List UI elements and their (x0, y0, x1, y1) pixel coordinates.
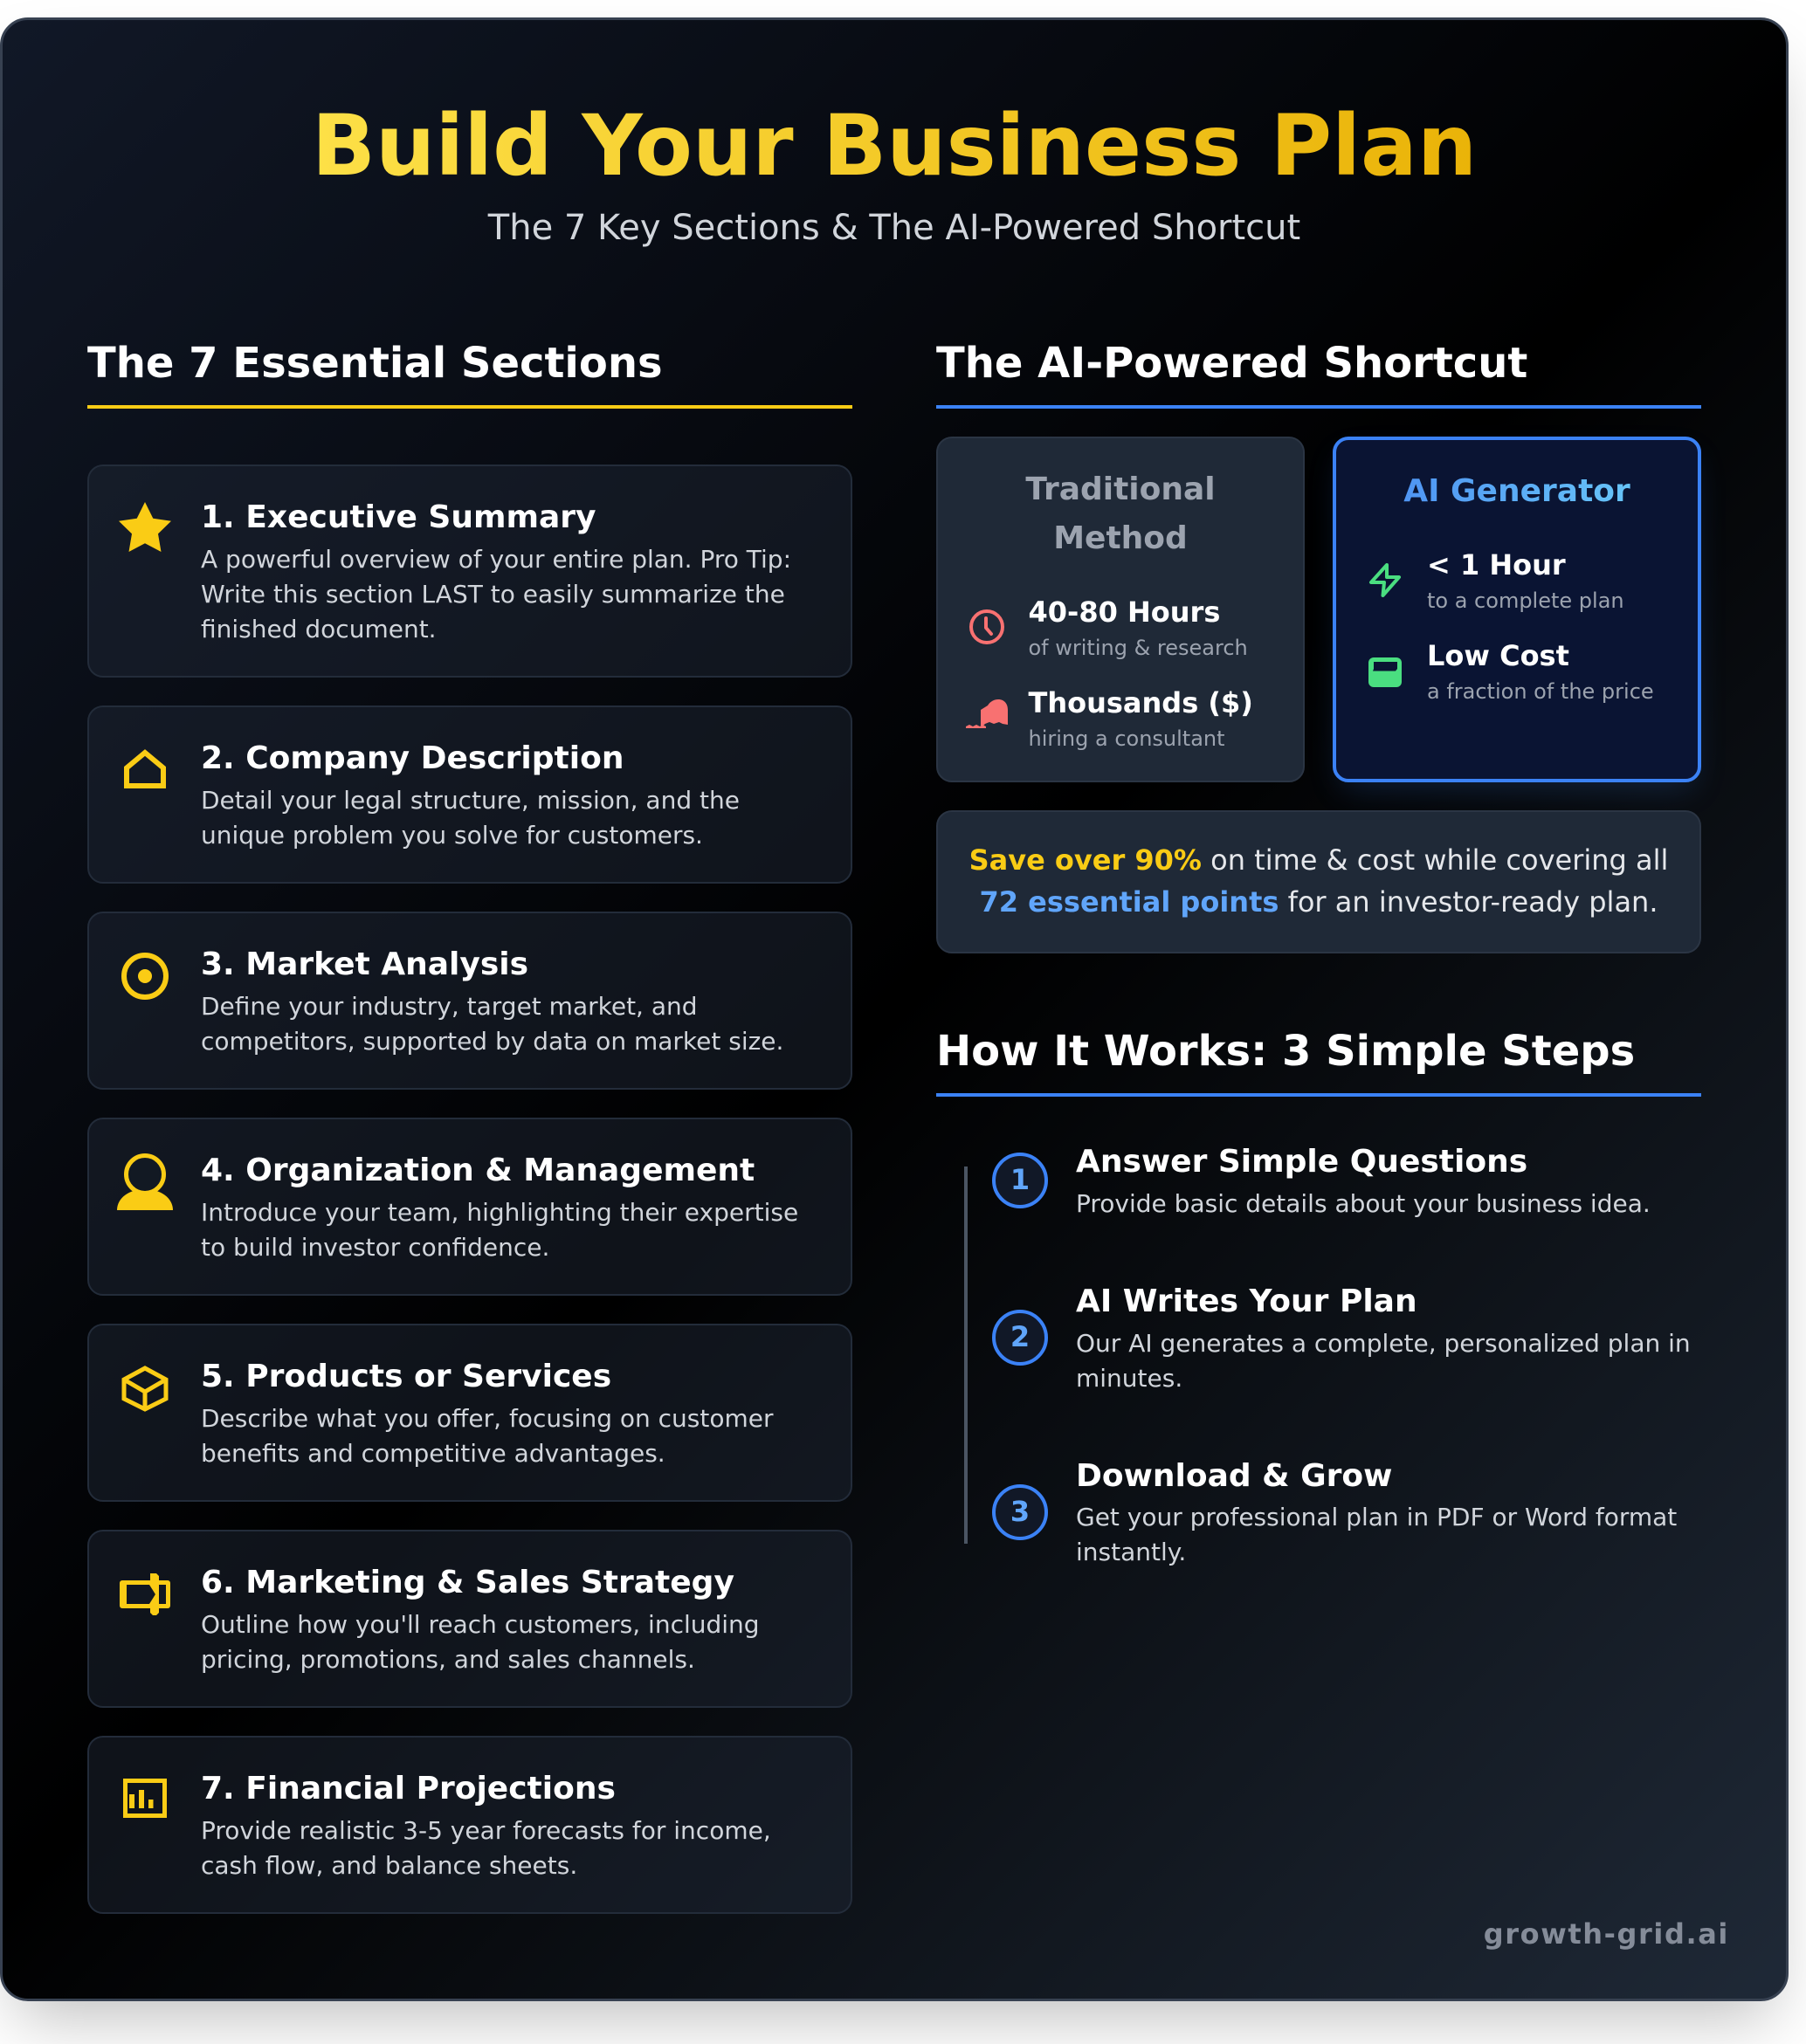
section description: Outline how you'll reach customers, including (201, 1610, 760, 1639)
section description (201, 1195, 798, 1265)
subtitle: The 7 Key Sections & The AI-Powered Shortcut (488, 208, 1300, 248)
section description: benefits and competitive advantages. (201, 1439, 665, 1468)
heading: the 7 essential sections: The 7 Essential Sections (87, 339, 663, 388)
stat caption: of writing & research (1029, 636, 1248, 660)
step number (992, 1153, 1048, 1208)
step number (992, 1310, 1048, 1366)
traditional heading (938, 465, 1303, 562)
section description (201, 1813, 771, 1883)
step 3 (992, 1454, 1701, 1576)
section title: 1. Executive Summary (201, 499, 596, 535)
icon: box (114, 1356, 176, 1419)
section description: Describe what you offer, focusing on customer (201, 1404, 774, 1433)
callout: savings (936, 810, 1701, 953)
callout text: Save over 90% on time & cost while covering all (969, 843, 1668, 877)
icon: lightning bolt (1362, 559, 1406, 602)
section title: 6. Marketing & Sales Strategy (201, 1565, 734, 1600)
section description: finished document. (201, 615, 437, 643)
stat: cost: Thousands ($) (1029, 686, 1253, 719)
section title: 2. Company Description (201, 740, 624, 776)
section description: to build investor confidence. (201, 1233, 549, 1262)
section title: 3. Market Analysis (201, 946, 528, 982)
section description (201, 786, 740, 850)
section description: Provide realistic 3-5 year forecasts for income, (201, 1816, 771, 1845)
section title: 4. Organization & Management (201, 1153, 755, 1188)
traditional heading: Traditional (1025, 471, 1216, 506)
icon: megaphone (114, 1562, 176, 1625)
step description: Provide basic details about your business idea. (1076, 1189, 1651, 1218)
step number: 2 (1010, 1320, 1030, 1353)
icon: bar chart (114, 1768, 176, 1831)
step description: minutes. (1076, 1364, 1182, 1393)
panel: section 2 company description (87, 705, 852, 884)
icon: house (124, 749, 166, 788)
step title: AI Writes Your Plan (1076, 1284, 1417, 1318)
icon: clock (961, 602, 1013, 655)
stat: hours: 40-80 Hours (1029, 595, 1220, 629)
AI generator heading: AI Generator (1403, 473, 1630, 509)
footer brand: growth-grid.ai (1484, 1917, 1729, 1951)
panel: section 6 marketing and sales strategy (87, 1530, 852, 1708)
timeline line (964, 1167, 968, 1544)
step title: Answer Simple Questions (1076, 1144, 1527, 1179)
icon: person (114, 1150, 176, 1213)
section title: 7. Financial Projections (201, 1771, 616, 1807)
step number: 3 (1010, 1495, 1030, 1528)
icon: star (119, 502, 171, 552)
step 2 (992, 1279, 1701, 1401)
section description: Introduce your team, highlighting their expertise (201, 1198, 798, 1227)
step description (1076, 1500, 1677, 1570)
panel: section 7 financial projections (87, 1736, 852, 1914)
heading: the AI-powered shortcut: The AI-Powered Shortcut (936, 339, 1527, 388)
panel: section 1 executive summary (87, 465, 852, 678)
section description: Detail your legal structure, mission, and the (201, 786, 740, 815)
step number: 1 (1010, 1163, 1030, 1196)
section description: Define your industry, target market, and (201, 992, 698, 1021)
panel: section 5 products or services (87, 1324, 852, 1502)
section description (201, 545, 791, 643)
panel: traditional method (936, 437, 1305, 782)
section description (201, 1607, 760, 1677)
panel: section 4 organization and management (87, 1118, 852, 1296)
section description: Write this section LAST to easily summarize the (201, 580, 785, 609)
callout text: 72 essential points for an investor-ready plan. (980, 885, 1658, 919)
stat: low cost: Low Cost (1427, 639, 1569, 672)
panel: AI generator (1333, 437, 1701, 782)
section description: cash flow, and balance sheets. (201, 1851, 577, 1880)
step description: Our AI generates a complete, personalized plan in (1076, 1329, 1691, 1358)
panel: section 3 market analysis (87, 912, 852, 1090)
heading: how it works: How It Works: 3 Simple Steps (936, 1027, 1635, 1076)
step title: Download & Grow (1076, 1458, 1392, 1493)
step description: Get your professional plan in PDF or Word format (1076, 1503, 1677, 1531)
stat: time: < 1 Hour (1427, 548, 1566, 582)
section description (201, 1401, 774, 1471)
icon: target (114, 944, 176, 1007)
section description (201, 989, 783, 1059)
title: Build Your Business Plan (312, 97, 1477, 195)
stat caption: a fraction of the price (1427, 679, 1654, 704)
callout text (938, 839, 1699, 923)
step description: instantly. (1076, 1538, 1186, 1566)
section title: 5. Products or Services (201, 1359, 611, 1394)
stat caption: hiring a consultant (1029, 726, 1225, 751)
step number (992, 1484, 1048, 1540)
section description: pricing, promotions, and sales channels. (201, 1645, 695, 1674)
step description (1076, 1326, 1691, 1396)
section description: competitors, supported by data on market size. (201, 1027, 783, 1056)
icon: money cost (961, 690, 1013, 733)
stat caption: to a complete plan (1427, 588, 1624, 613)
section description: unique problem you solve for customers. (201, 821, 703, 850)
step 1 (992, 1139, 1701, 1227)
icon: wallet (1362, 650, 1406, 694)
section description: A powerful overview of your entire plan. Pro Tip: (201, 545, 791, 574)
traditional heading: Method (1053, 520, 1188, 555)
